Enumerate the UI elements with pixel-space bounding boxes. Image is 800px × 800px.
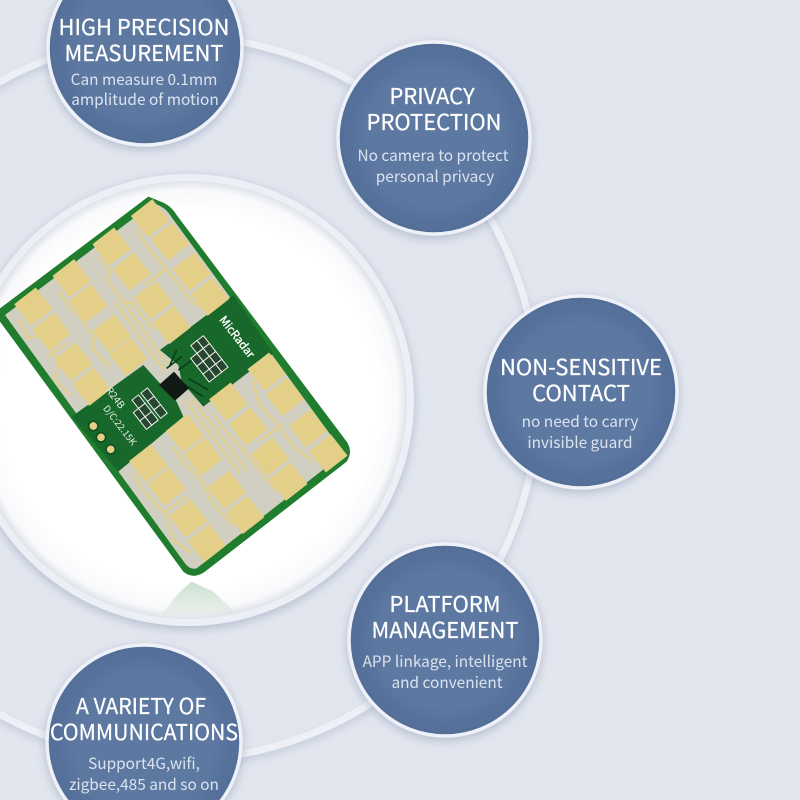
upper control block	[160, 295, 273, 407]
board reflection	[162, 582, 237, 614]
feature: high precision measurement	[48, 0, 242, 145]
feature: high precision measurement: amplitude of motion	[71, 88, 219, 110]
feed traces	[18, 230, 313, 553]
feature: non-sensitive contact: CONTACT	[532, 376, 630, 408]
feature: non-sensitive contact	[485, 296, 677, 488]
brand label: MicRadar	[216, 312, 259, 362]
lower control block	[72, 365, 183, 472]
feature: a variety of communications: COMMUNICATIONS	[50, 715, 238, 747]
connector pads	[89, 421, 115, 454]
radar PCB board	[0, 197, 350, 614]
gold patch antennas	[14, 199, 348, 563]
feature: high precision measurement: HIGH PRECISION	[58, 10, 230, 42]
feature: non-sensitive contact: no need to carry	[522, 410, 638, 432]
feature: a variety of communications: Support4G,wifi,	[88, 752, 200, 774]
feature: privacy protection: PRIVACY	[389, 79, 475, 111]
feature: a variety of communications: zigbee,485 and so on	[69, 773, 219, 795]
feature: high precision measurement: MEASUREMENT	[64, 36, 224, 68]
radar chip	[159, 350, 208, 401]
feature: privacy protection	[338, 42, 530, 234]
feature: high precision measurement: Can measure 0.1mm	[71, 68, 217, 90]
feature: a variety of communications	[47, 645, 241, 800]
feature: privacy protection: No camera to protect	[358, 144, 509, 166]
feature: non-sensitive contact: NON-SENSITIVE	[500, 350, 662, 382]
lower component cluster	[127, 388, 167, 429]
model label: R24B	[103, 383, 130, 412]
feature: non-sensitive contact: invisible guard	[527, 431, 633, 453]
feature: platform management: MANAGEMENT	[372, 613, 518, 645]
feature: privacy protection: personal privacy	[376, 165, 494, 187]
antenna ground plane	[5, 203, 344, 569]
feature: privacy protection: PROTECTION	[366, 105, 502, 137]
feature: a variety of communications: A VARIETY OF	[76, 689, 206, 721]
feature: platform management: and convenient	[391, 671, 503, 693]
product disc	[0, 174, 414, 626]
connecting ring	[0, 36, 538, 760]
date code label: D/C:22.15K	[100, 402, 141, 448]
feature: platform management: APP linkage, intelligent	[363, 650, 528, 672]
board outline	[0, 197, 350, 576]
upper component cluster	[184, 336, 228, 382]
feature: platform management: PLATFORM	[389, 587, 501, 619]
feature: platform management	[349, 544, 541, 736]
